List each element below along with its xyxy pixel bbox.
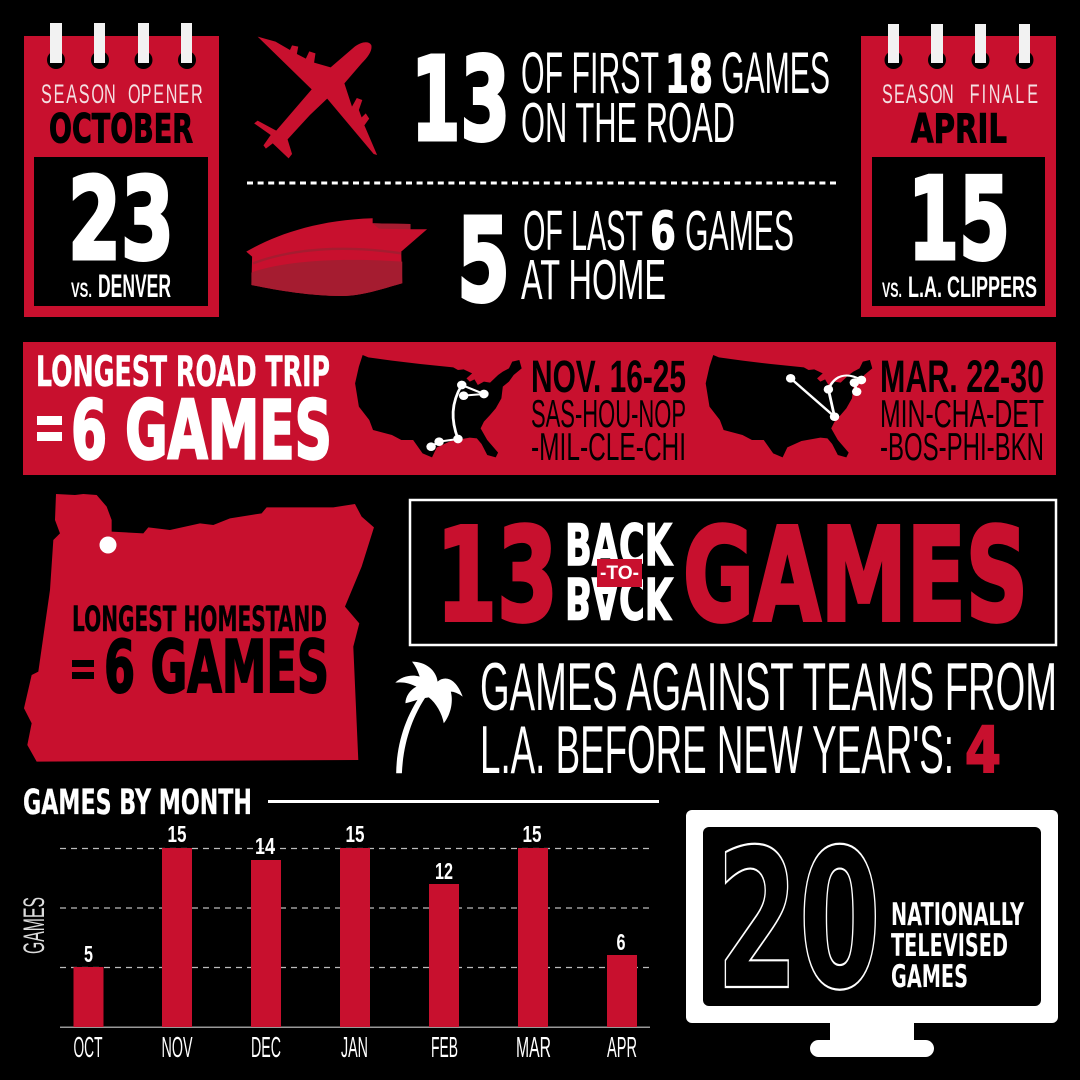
heading: 5 of last 6 games at home: OF LAST — [523, 199, 643, 263]
month labels: APR — [607, 1032, 637, 1064]
y axis label: GAMES — [18, 897, 51, 954]
month labels: MAR — [516, 1032, 551, 1064]
panel: oregon longest homestand — [24, 494, 374, 762]
bar values: 6 — [616, 929, 626, 955]
icon: palm tree — [395, 662, 463, 773]
chart heading: games by month — [23, 783, 659, 823]
date: 15: 15 — [908, 154, 1010, 286]
label: back to back — [565, 513, 673, 630]
stat: 20 outlined: 20 — [716, 808, 881, 1033]
bar values — [84, 821, 626, 967]
bars — [74, 848, 637, 1027]
panel: season opener calendar — [24, 23, 219, 317]
axis — [60, 1026, 650, 1028]
marker: portland — [100, 536, 116, 554]
text: november trip dates and opponents: -MIL-CLE-CHI — [531, 426, 686, 469]
stat: equals 6 games: 6 GAMES — [71, 384, 332, 478]
panel: back-to-back games — [410, 500, 1056, 651]
heading: longest homestand: LONGEST HOMESTAND — [72, 600, 327, 640]
text: games against LA teams — [480, 649, 1057, 788]
map: november road trip — [355, 355, 522, 457]
dotted divider — [247, 182, 837, 184]
bar values: 12 — [435, 858, 453, 884]
panel: longest road trip banner — [23, 342, 1056, 478]
stat: equals 6 games: 6 GAMES — [104, 625, 329, 709]
label: nationally televised games: TELEVISED — [891, 928, 1008, 964]
label: back to back: BACK — [565, 564, 673, 630]
map: oregon — [24, 494, 374, 762]
heading: 13 of first 18 games on the road — [411, 34, 830, 168]
stat: equals 6 games — [37, 384, 332, 478]
calendar rings — [47, 23, 196, 69]
map: march road trip — [706, 355, 872, 457]
text: november trip dates and opponents — [531, 351, 686, 469]
opponent: denver — [71, 268, 171, 304]
chart heading: games by month: GAMES BY MONTH — [23, 783, 252, 823]
month labels — [74, 1032, 637, 1064]
heading: longest road trip: LONGEST ROAD TRIP — [36, 347, 330, 396]
heading: 5 of last 6 games at home: GAMES — [685, 199, 794, 263]
opponent: denver: VS. — [71, 279, 92, 302]
label: back to back: BACK — [565, 513, 673, 579]
text: november trip dates and opponents: SAS-HOU-NOP — [531, 393, 686, 436]
heading: 5 of last 6 games at home: 6 — [650, 202, 676, 262]
text: march trip dates and opponents — [880, 351, 1044, 469]
icon: airplane — [254, 37, 377, 158]
bar values: 5 — [84, 941, 93, 967]
bar chart: games by month — [18, 821, 650, 1064]
heading: 5 of last 6 games at home: 5 — [457, 194, 510, 328]
bar values: 15 — [346, 821, 365, 847]
opponent: la clippers: VS. — [882, 279, 902, 302]
icon: television with 20 nationally televised games — [686, 808, 1058, 1057]
text: games against LA teams: 4 — [965, 714, 1001, 787]
label: april: APRIL — [911, 106, 1007, 152]
date panel — [34, 157, 208, 306]
heading: 13 of first 18 games on the road: OF FIRST — [521, 41, 659, 106]
bar values: 14 — [255, 833, 275, 859]
stat: equals 6 games — [72, 625, 329, 709]
month labels: NOV — [162, 1032, 193, 1064]
label: back to back: -TO- — [600, 563, 639, 584]
calendar rings — [884, 24, 1034, 69]
bar values: 15 — [522, 821, 542, 847]
date panel — [872, 157, 1045, 306]
heading: 5 of last 6 games at home: AT HOME — [521, 248, 666, 312]
heading: 13 of first 18 games on the road: 18 — [665, 44, 713, 106]
label: nationally televised games — [891, 897, 1024, 995]
label: season finale: SEASON FINALE — [882, 79, 1038, 109]
panel: season finale calendar — [861, 24, 1056, 317]
bar values: 15 — [168, 821, 187, 847]
stat: 13: 13 — [436, 501, 558, 651]
label: season opener: SEASON OPENER — [41, 79, 203, 109]
heading: 13 of first 18 games on the road: 13 — [411, 34, 510, 168]
icon: stadium — [246, 218, 427, 296]
month labels: FEB — [431, 1032, 458, 1064]
month labels: DEC — [251, 1032, 281, 1064]
month labels: JAN — [341, 1032, 368, 1064]
month labels: OCT — [74, 1032, 103, 1064]
label: nationally televised games: GAMES — [891, 959, 968, 995]
heading: 13 of first 18 games on the road: GAMES — [721, 41, 830, 106]
heading: 5 of last 6 games at home — [457, 194, 794, 328]
text: november trip dates and opponents: NOV. 16-25 — [531, 351, 686, 402]
label: october: OCTOBER — [49, 106, 193, 152]
opponent: denver: DENVER — [98, 268, 171, 304]
heading: 13 of first 18 games on the road: ON THE ROAD — [521, 91, 735, 155]
opponent: la clippers — [882, 271, 1037, 304]
date: 23: 23 — [68, 154, 174, 286]
